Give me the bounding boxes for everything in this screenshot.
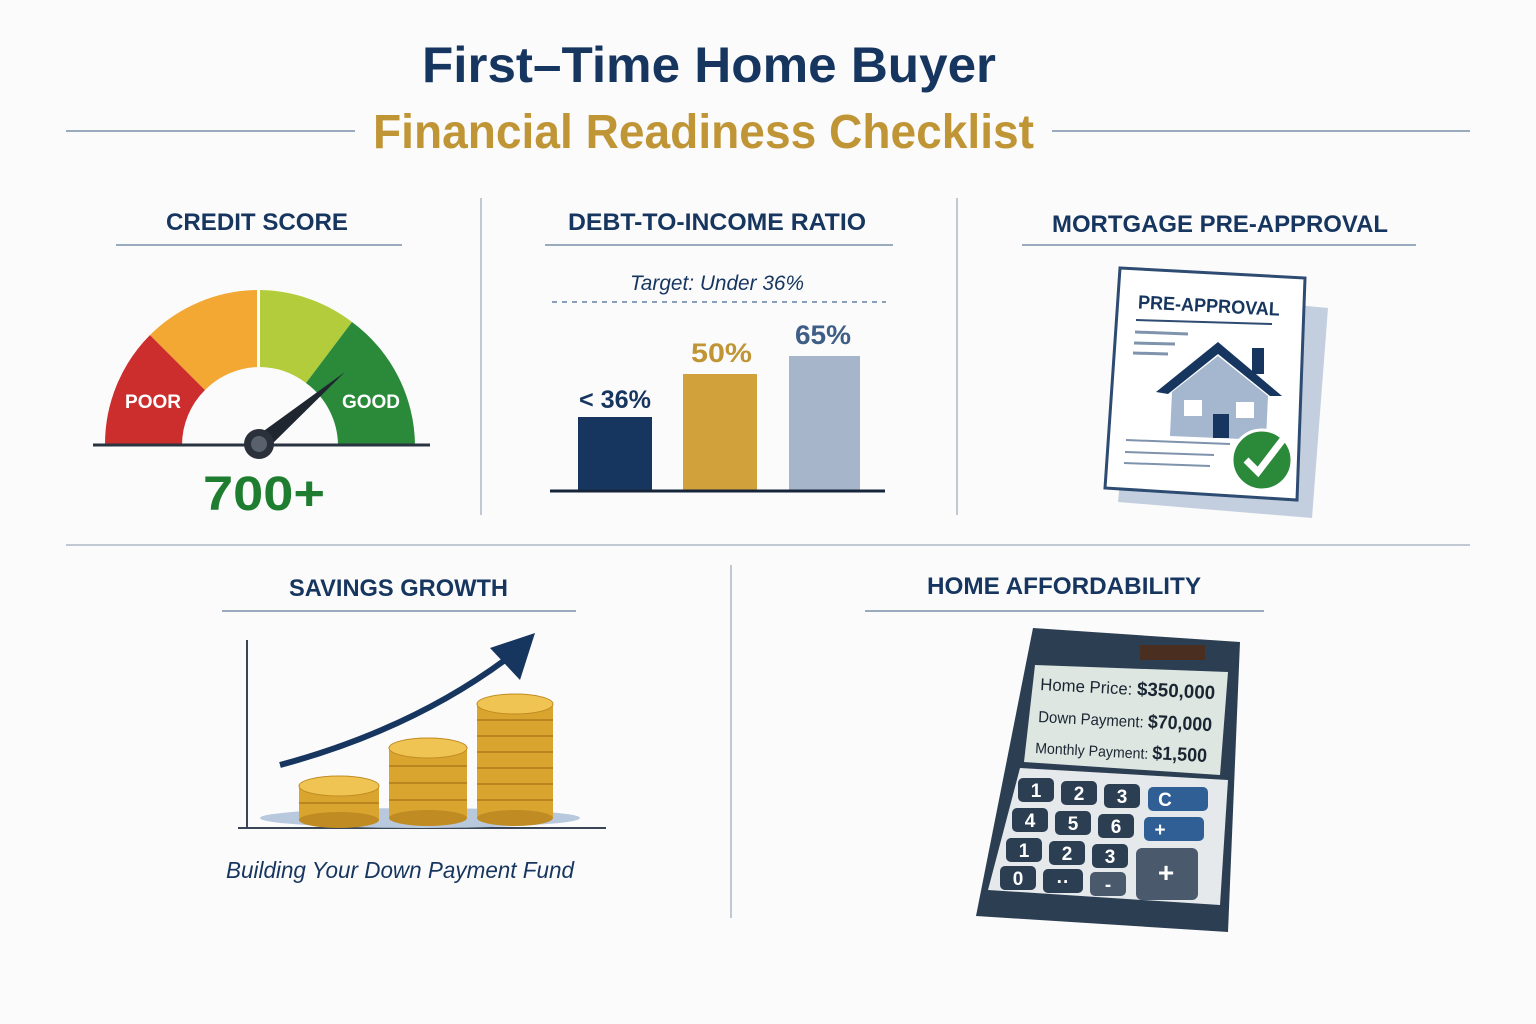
score value: 700+ [203,468,325,521]
icon: calculator: 0 [1013,869,1023,890]
bar chart [550,320,885,491]
heading: savings: SAVINGS GROWTH [289,575,508,602]
chart: coins and arrow [238,633,606,828]
gauge [93,290,430,459]
panel: savings growth [222,575,606,883]
icon: calculator: Monthly Payment: $1,500 [1035,737,1208,767]
icon: calculator: + [1154,820,1166,841]
icon: calculator: 6 [1111,817,1121,838]
icon: calculator: 5 [1068,814,1079,835]
icon: calculator: 3 [1105,847,1115,868]
heading: mortgage: MORTGAGE PRE-APPROVAL [1052,211,1388,238]
caption: Building Your Down Payment Fund [226,857,575,883]
panel: mortgage pre-approval [1022,211,1416,518]
bar chart: 65% [795,320,851,350]
icon: calculator: Home Price: $350,000 [1040,674,1216,704]
title: Financial Readiness Checklist [373,106,1034,159]
gauge: POOR [125,392,181,413]
heading: credit score: CREDIT SCORE [166,209,348,236]
icon: calculator: 2 [1062,844,1072,865]
icon: pre-approval document [1105,268,1328,518]
title: First–Time Home Buyer [422,37,996,93]
title [373,37,1034,159]
icon: calculator [976,628,1240,932]
icon: calculator: C [1158,790,1172,811]
gauge: GOOD [342,392,400,413]
panel: debt-to-income [545,209,893,491]
heading: affordability: HOME AFFORDABILITY [927,573,1201,600]
bar chart: < 36% [579,386,651,414]
panel: home affordability [865,573,1264,932]
icon: calculator: 1 [1031,781,1042,802]
icon: calculator: 4 [1025,811,1036,832]
icon: calculator: - [1105,875,1111,896]
icon: calculator: + [1158,857,1174,888]
icon: pre-approval document: PRE-APPROVAL [1137,292,1281,321]
icon: calculator: 1 [1019,841,1030,862]
heading: DTI: DEBT-TO-INCOME RATIO [568,209,866,236]
icon: calculator: 2 [1074,784,1084,805]
icon: calculator: ·· [1057,872,1069,893]
icon: calculator: Down Payment: $70,000 [1038,706,1213,736]
icon: calculator: 3 [1117,787,1127,808]
bar chart: 50% [691,338,752,368]
target label: Target: Under 36% [630,272,804,295]
panel: credit score [93,209,430,521]
